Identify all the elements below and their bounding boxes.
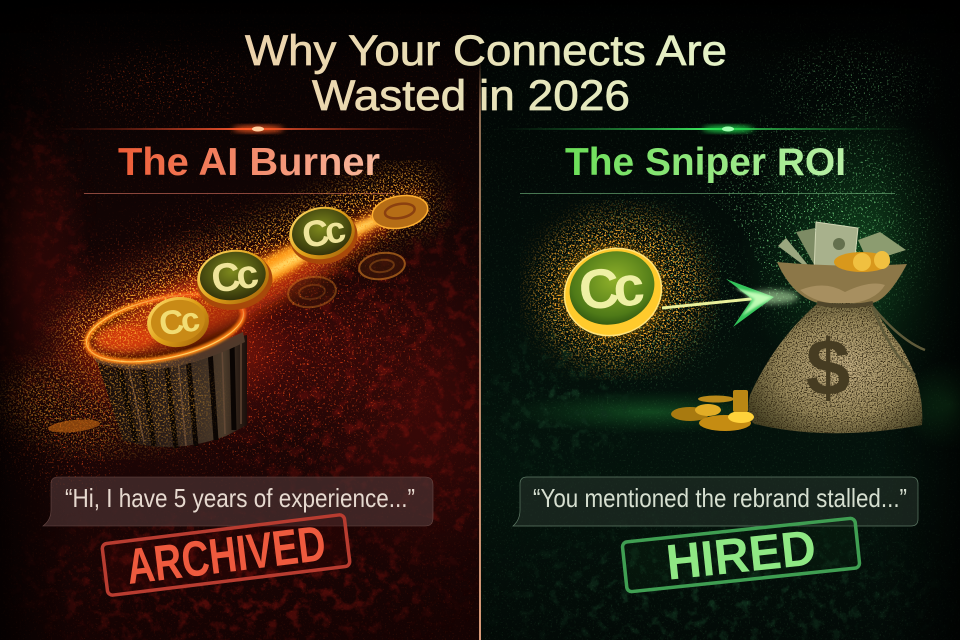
illustration: green sniper coin: Cc [576,253,646,322]
left heading divider with flare [55,126,439,132]
icon: upper flying coin: Cc [299,208,348,256]
stamp: hired: HIRED [663,519,819,591]
speech bubble: left [43,477,433,526]
stamp: hired [622,515,860,595]
panel: left background [0,19,480,640]
title: Wasted in 2026 [312,72,630,120]
illustration: money bag: $ [806,323,850,412]
illustration: money bag [740,222,930,440]
title [245,27,727,120]
panel: right background [480,0,960,640]
stamp: archived: ARCHIVED [123,515,329,595]
illustration: burning trash bin [45,280,295,448]
icon: ground coin [48,417,100,435]
icon: upper flying coin [285,201,362,269]
icon: coin inside bin: Cc [157,300,201,343]
speech bubble: left: “Hi, I have 5 years of experience...” [65,483,415,513]
heading: The AI Burner: The AI Burner [118,141,380,184]
right heading divider with flare [502,126,912,132]
left sub-heading rule [84,193,394,194]
illustration: green sniper coin [520,200,720,380]
flame trail [0,160,480,460]
icon: gold coin pile [671,390,754,431]
arrow: coin to money bag [662,279,798,327]
icon: distant burning coin [370,191,430,233]
top vignette [0,0,960,70]
icon: coin inside bin [144,293,212,351]
center divider [479,60,481,640]
heading: The Sniper ROI: The Sniper ROI [565,141,846,184]
speech bubble: right: “You mentioned the rebrand stalled...” [533,483,907,513]
right sub-heading rule [520,193,895,194]
icon: faint coin right [357,250,407,282]
speech bubble: right [513,477,918,526]
title: Why Your Connects Are [245,27,727,75]
icon: faint coin lower [286,274,338,310]
icon: large flying coin [193,245,276,315]
icon: large flying coin: Cc [209,252,261,302]
